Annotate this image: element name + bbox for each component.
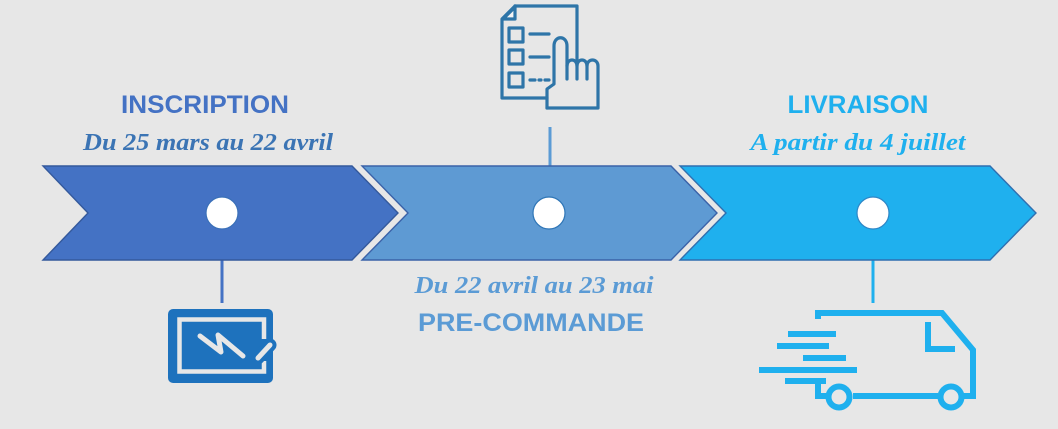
chevron: livraison bbox=[680, 166, 1036, 260]
chevron: pre-commande bbox=[362, 166, 717, 260]
dates: pre-commande: Du 22 avril au 23 mai bbox=[413, 273, 654, 299]
dates: livraison: A partir du 4 juillet bbox=[748, 130, 967, 156]
icon: checklist with pointing hand bbox=[502, 6, 598, 108]
chevron: inscription bbox=[43, 166, 398, 260]
icon: signature tablet bbox=[168, 309, 273, 383]
marker: pre-commande bbox=[533, 197, 565, 229]
icon: delivery van bbox=[759, 313, 973, 408]
connector: pre-commande bbox=[548, 127, 552, 168]
marker: livraison bbox=[857, 197, 889, 229]
connector: livraison bbox=[872, 258, 874, 303]
connector: inscription bbox=[220, 258, 224, 303]
heading: pre-commande: PRE-COMMANDE bbox=[418, 309, 644, 337]
heading: livraison: LIVRAISON bbox=[788, 91, 928, 119]
dates: inscription: Du 25 mars au 22 avril bbox=[82, 130, 333, 156]
heading: inscription: INSCRIPTION bbox=[121, 91, 289, 119]
marker: inscription bbox=[206, 197, 238, 229]
